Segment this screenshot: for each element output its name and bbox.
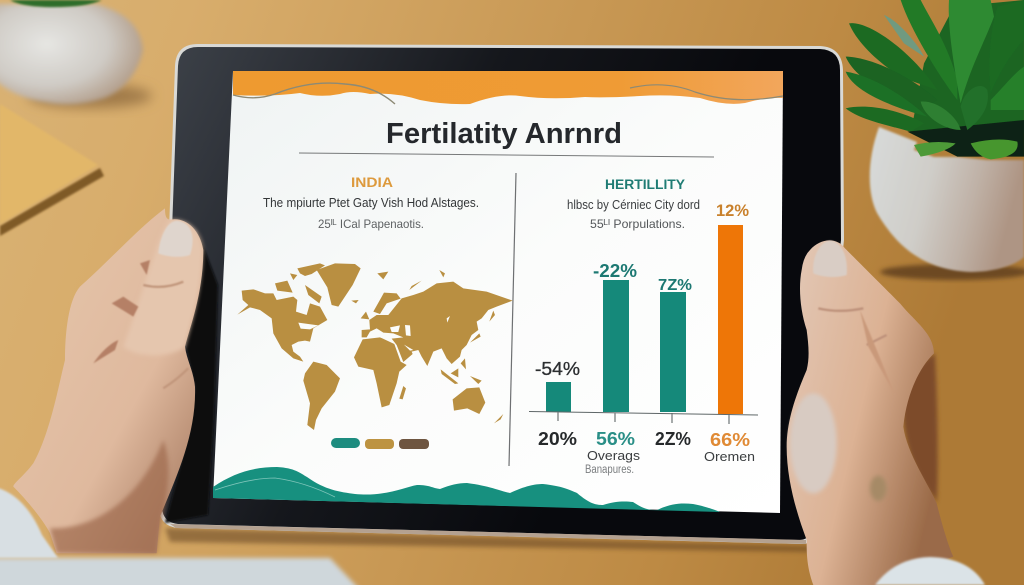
top right leaf xyxy=(989,0,1024,93)
New Zealand xyxy=(494,414,503,423)
panel divider xyxy=(509,173,516,466)
grey header flourish left xyxy=(233,83,395,104)
tablet xyxy=(159,44,844,544)
title rule xyxy=(299,153,714,157)
hand shadow on bezel xyxy=(165,232,218,523)
bottom foreground sleeve xyxy=(0,558,360,585)
rosette dark centre xyxy=(907,120,1024,157)
Africa xyxy=(354,337,407,407)
India heading: INDIA xyxy=(351,174,393,190)
bar value labels: -22% xyxy=(593,261,637,281)
grey header flourish right xyxy=(630,85,783,100)
bar value labels: -54% xyxy=(535,359,580,379)
white pot xyxy=(870,127,1024,272)
left potted plant xyxy=(0,0,152,108)
lower leaf left xyxy=(914,142,956,157)
Madagascar xyxy=(399,386,406,399)
silver tablet rim xyxy=(159,44,844,544)
pot shadow xyxy=(880,264,1024,280)
legend swatch: teal xyxy=(331,438,360,448)
left wrist shadow xyxy=(50,440,168,553)
category percentages: 56% xyxy=(596,429,635,449)
rosette leaves xyxy=(921,102,961,130)
Southeast Asia islands xyxy=(441,358,482,384)
wave highlight line xyxy=(215,478,335,497)
Hertillity heading: HERTILLITY xyxy=(605,177,685,192)
Eurasia xyxy=(362,282,513,366)
right hand pale highlight xyxy=(790,393,837,493)
category percentages: 2Z% xyxy=(655,429,691,449)
British Isles xyxy=(361,312,369,319)
category labels: Oremen xyxy=(704,450,755,464)
right hand xyxy=(787,240,953,585)
lower leaf right xyxy=(971,140,1018,159)
succulent leaves xyxy=(846,0,1024,159)
rosette leaf right xyxy=(961,86,988,130)
shadow under tablet xyxy=(165,528,810,552)
Australia xyxy=(453,387,485,414)
category labels xyxy=(585,449,755,476)
left hand xyxy=(13,208,203,553)
bar 4 xyxy=(718,225,743,414)
right thumbnail xyxy=(813,241,847,277)
bar 3 xyxy=(660,292,686,412)
legend swatch: brown xyxy=(399,439,429,449)
left thumbnail xyxy=(158,221,193,257)
Greenland xyxy=(317,263,361,307)
left shirt cuff xyxy=(0,487,58,558)
left plant leaves xyxy=(10,0,102,7)
right hand side shadow xyxy=(903,353,938,503)
India description: The mpiurte Ptet Gaty Vish Hod Alstages. xyxy=(263,196,479,210)
wide left leaf xyxy=(849,23,937,90)
category percentages: 66% xyxy=(710,430,750,450)
right shirt cuff xyxy=(875,557,985,585)
category percentages xyxy=(538,429,750,450)
legend swatch: tan xyxy=(365,439,394,449)
left finger gap shadows xyxy=(93,260,150,363)
dark bezel xyxy=(162,47,841,540)
South America xyxy=(303,362,340,430)
category percentages: 20% xyxy=(538,429,577,449)
left thumb highlight xyxy=(123,220,203,355)
map water gaps xyxy=(298,316,450,351)
title: Fertilatity Anrnrd xyxy=(386,118,622,150)
left second leaf xyxy=(846,72,927,117)
chart axis and ticks xyxy=(529,412,758,424)
Hertillity description xyxy=(567,198,700,231)
screen xyxy=(213,71,783,513)
left middle leaf xyxy=(846,57,937,110)
foliage backdrop xyxy=(911,0,1024,133)
right palm mark xyxy=(870,476,887,501)
left pot body xyxy=(0,4,143,104)
notebook on the desk xyxy=(0,104,104,236)
bar value labels: 12% xyxy=(716,201,749,220)
bar 1 xyxy=(546,382,571,412)
right finger fold xyxy=(860,310,895,395)
screen background xyxy=(213,71,783,513)
panel: India map xyxy=(237,174,513,449)
left lower leaf xyxy=(846,107,924,132)
Arctic islands north of Eurasia xyxy=(377,270,445,290)
bar value labels: 7Z% xyxy=(658,277,692,294)
Scandinavia xyxy=(373,293,401,314)
right knuckle creases xyxy=(818,308,887,345)
India description: 25ᴵᴸ ICal Papenaotis. xyxy=(318,217,424,231)
panel: fertility bar chart xyxy=(529,177,758,476)
Hertillity description: 55ᴸᴵ Porpulations. xyxy=(590,217,685,231)
Japan and Kamchatka xyxy=(470,311,495,343)
Canadian Arctic islands xyxy=(275,263,325,303)
bar value labels xyxy=(535,201,749,379)
left knuckle creases xyxy=(143,282,188,388)
bar 2 xyxy=(603,280,629,412)
category labels: Banapures. xyxy=(585,464,634,476)
left pot shadow xyxy=(28,84,152,108)
Iceland xyxy=(351,300,359,303)
bezel lower lip xyxy=(170,524,806,544)
North America xyxy=(237,289,327,362)
Hertillity description: hlbsc by Cérniec City dord xyxy=(567,198,700,212)
right palm and thumb xyxy=(787,240,953,585)
India description xyxy=(263,196,479,231)
right potted plant xyxy=(846,0,1024,280)
bars xyxy=(546,225,743,414)
left palm and thumb xyxy=(13,208,203,553)
world map xyxy=(237,263,513,430)
top centre leaf xyxy=(949,0,994,103)
blue grey leaf xyxy=(884,15,924,57)
right lower leaf xyxy=(991,67,1024,110)
category labels: Overags xyxy=(587,449,640,463)
map legend xyxy=(331,438,429,449)
orange wave header xyxy=(233,71,783,104)
teal wave footer xyxy=(213,467,720,512)
top centre-left leaf xyxy=(901,0,957,100)
